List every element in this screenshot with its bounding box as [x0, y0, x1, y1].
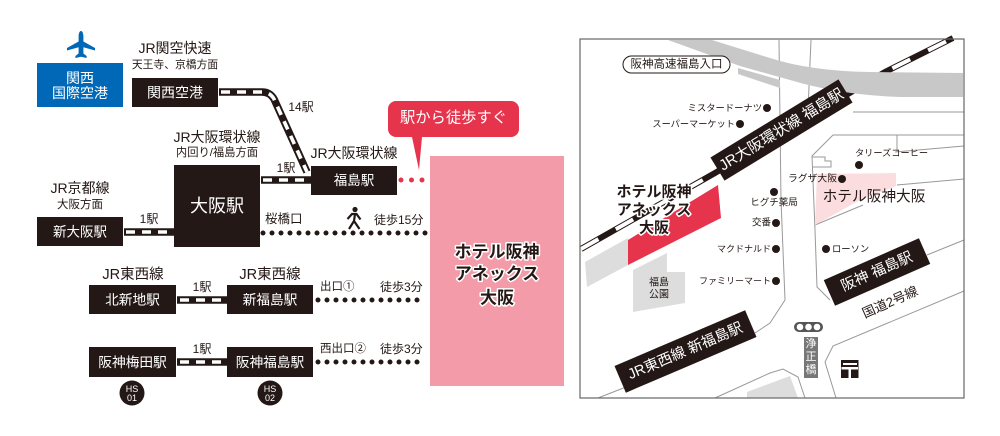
line label: JR Kyoto: JR京都線: [50, 180, 110, 196]
badge: HS02: [258, 380, 282, 406]
station: Hanshin Umeda: 阪神梅田駅: [98, 355, 167, 370]
POI: Mister Donut: ミスタードーナツ: [688, 103, 762, 113]
line label: JR Kyoto: 大阪方面: [57, 197, 103, 211]
map background: [580, 39, 964, 398]
POI: police box: [752, 216, 780, 228]
station: Hanshin Fukushima: [227, 347, 313, 377]
station: Osaka: 大阪駅: [190, 196, 244, 216]
POI: Higuchi pharmacy: [750, 188, 798, 208]
line label: JR Kyoto: [50, 180, 110, 211]
walk route: Sakurabashi exit: 桜橋口: [265, 212, 303, 226]
panel: area map: [580, 38, 964, 398]
hotel annex label: 大阪: [639, 218, 669, 236]
hotel block: [430, 156, 564, 386]
line label: JR Kanku rapid: JR関空快速: [138, 40, 212, 56]
POI: FamilyMart: ファミリーマート: [699, 276, 771, 286]
station: Hanshin Umeda: [89, 347, 176, 377]
hotel block: アネックス: [455, 264, 539, 284]
track: Kansai Airport to Fukushima: [219, 92, 307, 172]
badge: HS02: 02: [265, 393, 275, 403]
icon: traffic signal: [794, 322, 823, 332]
station: Osaka: [174, 165, 260, 247]
red dotted connector: [401, 178, 431, 182]
line label: JR Kanku rapid: 天王寺、京橋方面: [132, 57, 218, 71]
label: 14 stations: 14駅: [288, 100, 314, 114]
station label: Hanshin Fukushima: 阪神 福島駅: [838, 248, 916, 295]
station label: JR Fukushima: JR大阪環状線 福島駅: [716, 86, 847, 174]
walk route: west exit 2: [318, 341, 426, 362]
road label: Route 2: 国道2号線: [860, 283, 920, 321]
label: Joshobashi: [804, 336, 818, 378]
Fukushima Park: 公園: [649, 288, 669, 300]
POI: Tully's Coffee: [855, 147, 928, 169]
label: expressway entrance: [623, 56, 730, 73]
POI: Lawson: ローソン: [832, 244, 869, 254]
station: Kitashinchi: 北新地駅: [105, 292, 160, 308]
icon: walking person: [348, 207, 360, 229]
station: Shin-Fukushima: [227, 285, 313, 314]
line label: JR Tozai Shin-Fukushima: JR東西線: [239, 266, 301, 283]
station label: JR Shin-Fukushima: JR東西線 新福島駅: [625, 319, 746, 383]
label: Joshobashi: 正: [806, 351, 816, 363]
POI: Tully's Coffee: タリーズコーヒー: [855, 147, 928, 158]
POI: Higuchi pharmacy: ヒグチ薬局: [750, 196, 798, 208]
station: Shin-Osaka: 新大阪駅: [53, 224, 107, 240]
badge: HS01: 01: [127, 393, 137, 403]
lower grey block: [747, 376, 798, 398]
walk route: west exit 2: 西出口②: [320, 342, 366, 355]
map frame: [580, 39, 964, 398]
station: Shin-Osaka: [37, 217, 123, 246]
expressway: [668, 40, 963, 97]
station: Hanshin Fukushima: 阪神福島駅: [236, 355, 305, 370]
Hotel Hanshin Osaka building: [815, 173, 896, 225]
badge: HS02: HS: [264, 384, 276, 394]
station: Kansai Airport: [132, 78, 218, 107]
station: Fukushima: [311, 166, 397, 195]
POI: police box: 交番: [752, 216, 771, 228]
hotel block: ホテル阪神: [454, 242, 540, 262]
badge: HS01: [120, 380, 144, 406]
line label: JR Osaka Loop inner: [173, 129, 261, 159]
track: Osaka to Fukushima: [261, 176, 311, 184]
rail line: JR Osaka Loop: [581, 38, 953, 249]
line label: JR Osaka Loop inner: JR大阪環状線: [173, 129, 261, 145]
label: 1 station Osaka to Fukushima: 1駅: [277, 161, 295, 175]
Fukushima Park: 福島: [649, 276, 669, 288]
POI: McDonald's: マクドナルド: [717, 244, 771, 254]
line label: JR Kanku rapid: [132, 40, 218, 71]
panel: route diagram: [37, 31, 564, 406]
station: Kitashinchi: [89, 285, 176, 314]
label: 1 station Shin-Osaka: 1駅: [140, 212, 158, 226]
roads: [598, 40, 964, 398]
Kansai International Airport box: [37, 63, 123, 107]
badge: HS01: HS: [126, 384, 138, 394]
track: Kitashinchi to Shin-Fukushima: [177, 296, 227, 304]
station: Fukushima: 福島駅: [334, 173, 375, 188]
line label: JR Osaka Loop at Fukushima: JR大阪環状線: [310, 145, 398, 161]
station label: JR Shin-Fukushima: [615, 310, 756, 393]
line label: JR Osaka Loop inner: 内回り/福島方面: [176, 145, 258, 159]
label: Joshobashi: 橋: [806, 362, 816, 376]
label: Joshobashi: 浄: [806, 336, 816, 350]
Kansai International Airport box: 関西: [66, 70, 94, 86]
label: 1 station Tozai: 1駅: [193, 280, 211, 294]
walk route: exit 1: 出口①: [320, 280, 355, 293]
hotel block: 大阪: [480, 288, 514, 308]
track: Shin-Osaka to Osaka: [124, 228, 174, 236]
callout: right by the station: [388, 101, 519, 170]
hotel label: Hotel Hanshin Osaka: ホテル阪神大阪: [823, 188, 926, 205]
track: Hanshin Umeda to Fukushima: [177, 358, 227, 366]
hotel annex label: [616, 184, 692, 236]
walk route: Sakurabashi exit: [263, 212, 426, 233]
Fukushima Park: [633, 253, 685, 312]
Kansai International Airport box: 国際空港: [52, 85, 108, 101]
icon: airplane: [67, 31, 95, 58]
callout: right by the station: 駅から徒歩すぐ: [400, 110, 507, 126]
station: Shin-Fukushima: 新福島駅: [243, 292, 298, 308]
hotel annex label: アネックス: [617, 202, 691, 218]
grey block: [585, 238, 628, 287]
hotel annex building: [628, 185, 721, 265]
walk route: exit 1: 徒歩3分: [380, 279, 423, 294]
label: 1 station Hanshin: 1駅: [193, 342, 211, 356]
hotel annex label: ホテル阪神: [616, 184, 692, 200]
station label: Hanshin Fukushima: [824, 238, 930, 306]
icon: post office: [841, 360, 858, 378]
label: expressway entrance: 阪神高速福島入口: [630, 56, 722, 70]
POI: Laxa Osaka: ラグザ大阪: [788, 172, 837, 184]
line label: JR Tozai Kitashinchi: JR東西線: [102, 266, 164, 283]
walk route: Sakurabashi exit: 徒歩15分: [374, 212, 423, 227]
walk route: west exit 2: 徒歩3分: [380, 341, 423, 356]
walk route: exit 1: [318, 279, 426, 300]
station: Kansai Airport: 関西空港: [147, 84, 203, 100]
POI: supermarket: スーパーマーケット: [652, 119, 735, 129]
